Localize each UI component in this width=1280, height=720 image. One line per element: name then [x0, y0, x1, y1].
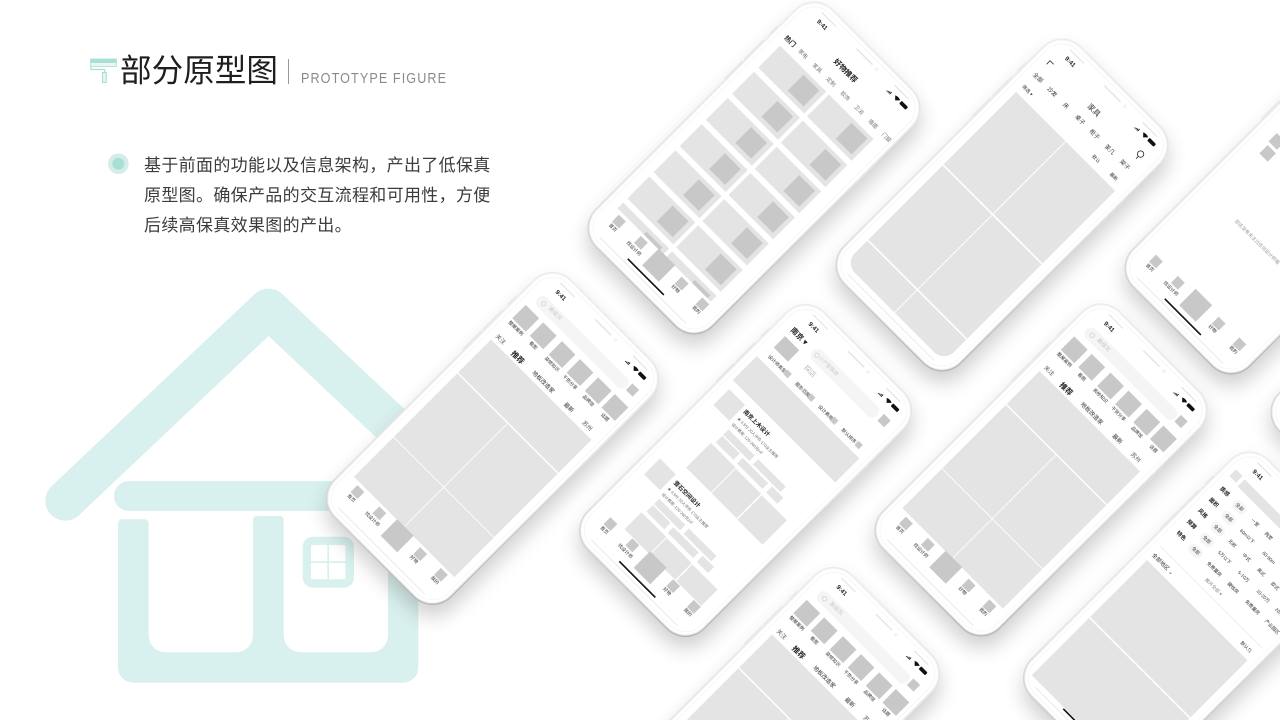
- category tabs: 全部: [1031, 71, 1045, 85]
- feed tabs: [774, 627, 876, 720]
- category icons: 装修知识: [824, 650, 842, 669]
- phone: furniture list: [818, 27, 1185, 394]
- heading: 家具: [1085, 101, 1103, 119]
- filter options: 风格: [1196, 507, 1210, 520]
- home bar: [619, 561, 656, 598]
- text block: description: [144, 156, 491, 235]
- sort row: 服务范围: [793, 380, 812, 399]
- sort row: 设计师类型: [766, 353, 788, 375]
- sort row: 默认排序: [840, 427, 858, 445]
- filter options: 一室: [1250, 517, 1261, 528]
- text block: description: 基于前面的功能以及信息架构，产出了低保真: [144, 156, 491, 175]
- icon: search: [1134, 150, 1145, 161]
- category icons: 整屋案例: [507, 319, 525, 338]
- status bar: 9:41: [807, 321, 821, 335]
- icon: bullet: [108, 153, 129, 174]
- tab bar: 找设计师: [625, 240, 643, 258]
- category tabs: 定制: [824, 75, 838, 89]
- phone: designers list: [561, 292, 929, 659]
- category tabs: [783, 33, 894, 145]
- search bar: 高级灰: [547, 305, 564, 322]
- category tabs: 家电: [796, 47, 810, 61]
- filter options: 北欧: [1226, 538, 1238, 549]
- tab bar: 找设计师: [363, 510, 382, 528]
- filter options: 展开全部 ▾: [1203, 576, 1224, 598]
- text block: description: 后续高保真效果图的产出。: [144, 216, 352, 235]
- tab bar: 好物: [1207, 323, 1219, 335]
- category icons: 看图: [527, 340, 539, 352]
- category icons: [788, 600, 909, 720]
- empty message: 您还没有关注过任何设计师哦: [1233, 218, 1280, 266]
- category icons: 话题: [599, 411, 611, 423]
- tab bar: 好物: [957, 585, 969, 597]
- filter row: 默认: [1090, 153, 1102, 165]
- feed tabs: 关注: [775, 627, 789, 641]
- tab bar: [344, 482, 450, 589]
- search bar: 高级灰: [828, 600, 845, 617]
- designer card 2: 壹石空间设计: [672, 479, 702, 509]
- status bar: 9:41: [835, 584, 849, 598]
- heading: 好物推荐: [832, 56, 860, 85]
- feed tabs: 关注: [1042, 364, 1056, 378]
- tab bar: 首页: [607, 222, 619, 234]
- phone: recommended goods: [570, 0, 937, 357]
- designer card 1: ★ 4.9分 20人评价 170业主推荐: [736, 415, 780, 459]
- image grid: [845, 92, 1115, 362]
- category tabs: 家具: [811, 61, 824, 75]
- category tabs: [1031, 71, 1132, 172]
- tab bar: 我的: [682, 606, 694, 618]
- channel label: 探店: [802, 363, 818, 379]
- designer card 1: 设计费用: 120-260元/㎡: [731, 421, 764, 455]
- city selector: 南京 ▾: [789, 325, 811, 348]
- filter options: 5-10万: [1236, 570, 1251, 584]
- image grid: [635, 635, 872, 720]
- tab bar: [587, 507, 709, 629]
- title: 部分原型图: [120, 52, 278, 88]
- subtitle: PROTOTYPE FIGURE: [301, 69, 446, 86]
- designer card 2: 设计费用: 120-260元/㎡: [661, 491, 695, 525]
- designer card 1: [668, 389, 824, 545]
- filter options: 预算: [1185, 518, 1199, 531]
- icon: house background: [65, 308, 425, 683]
- category tabs: 墙面: [866, 117, 880, 131]
- phone: home feed middle right: [857, 292, 1224, 659]
- designer card 1: 南京上木设计: [742, 408, 772, 438]
- filter options: 美式: [1255, 566, 1267, 578]
- category tabs: 桌子: [1073, 113, 1087, 127]
- filter options: 两室: [1263, 530, 1275, 541]
- tab bar: 找设计师: [616, 542, 635, 560]
- status bar: 9:41: [815, 18, 829, 32]
- area and sort: 默认⇅: [1239, 640, 1254, 655]
- designer card 2: [599, 458, 754, 614]
- tab bar: 首页: [1144, 262, 1156, 274]
- tab bar: 好物: [408, 554, 420, 565]
- feed tabs: 地板改造家: [1079, 400, 1105, 427]
- tab bar: 首页: [894, 524, 906, 536]
- image grid: [354, 340, 591, 577]
- status bar: [835, 584, 928, 677]
- status bar: [1102, 320, 1196, 414]
- search bar: [815, 589, 920, 694]
- feed tabs: [493, 332, 595, 434]
- home bar: [1063, 708, 1100, 720]
- filter options: 质感: [1218, 485, 1232, 498]
- tab bar: 首页: [346, 492, 357, 504]
- category icons: 装修知识: [543, 355, 561, 374]
- tab bar: 找设计师: [912, 542, 930, 560]
- filter options: 全部: [1190, 545, 1202, 557]
- image grid: [1032, 560, 1247, 720]
- category icons: [507, 305, 628, 427]
- filter options: 60-90m: [1261, 551, 1276, 565]
- placeholder squares: [1258, 133, 1280, 162]
- search bar: [534, 294, 639, 399]
- phone: home feed bottom: [589, 555, 957, 720]
- icon: back: [1047, 61, 1054, 68]
- divider: [288, 59, 289, 84]
- category icons: 品牌馆: [862, 688, 877, 703]
- tab bar: 首页: [599, 524, 610, 536]
- filter options: 中式: [1241, 552, 1252, 564]
- feed tabs: 最新: [1110, 432, 1124, 446]
- filter options: 硬核房: [1226, 580, 1241, 596]
- search bar: [1082, 325, 1188, 431]
- feed tabs: 推荐: [790, 643, 808, 661]
- product grid: [601, 46, 874, 318]
- filter options: 特色: [1175, 529, 1188, 543]
- placeholder image: [774, 336, 799, 362]
- category icons: 干货分享: [842, 668, 860, 687]
- feed tabs: [1041, 363, 1143, 465]
- category icons: [1055, 336, 1177, 458]
- category icons: 话题: [1148, 443, 1159, 455]
- status bar: 9:41: [554, 289, 568, 303]
- category icons: 话题: [880, 706, 892, 718]
- status bar: 9:41: [1102, 320, 1116, 334]
- category icons: 干货分享: [1109, 405, 1128, 423]
- tab bar: [596, 204, 718, 326]
- category tabs: 软饰: [838, 89, 852, 103]
- category tabs: 卫浴: [852, 103, 866, 117]
- home bar: [1164, 298, 1201, 335]
- feed tabs: 苏州: [1129, 450, 1143, 464]
- status bar: [807, 321, 900, 414]
- filter row: [1020, 83, 1120, 183]
- filter options: 60m以下: [1238, 528, 1256, 546]
- feed tabs: 最新: [562, 400, 576, 414]
- placeholder header: [1228, 469, 1280, 567]
- tab bar: 好物: [670, 283, 682, 295]
- feed tabs: 关注: [494, 332, 508, 346]
- feed tabs: 地板改造家: [530, 369, 557, 395]
- category icons: 整屋案例: [1055, 351, 1074, 369]
- status bar: 9:41: [1251, 468, 1265, 482]
- tab bar: 我的: [429, 574, 441, 586]
- category tabs: 柜子: [1088, 127, 1102, 141]
- category icons: 装修知识: [1091, 387, 1110, 405]
- sort row: [766, 353, 863, 450]
- category tabs: 架子: [1118, 158, 1131, 172]
- filter options: 免费量房: [1243, 598, 1262, 617]
- tab bar: 我的: [1228, 344, 1239, 356]
- category tabs: 床: [1061, 101, 1071, 111]
- filter options: 免费量房: [1205, 560, 1224, 579]
- filter options: 全部: [1212, 523, 1224, 535]
- category icons: 干货分享: [561, 373, 579, 392]
- phone: filter list: [1005, 440, 1280, 720]
- sort row: 设计费用: [816, 403, 835, 422]
- filter options: [1160, 483, 1280, 650]
- feed tabs: 苏州: [580, 419, 594, 433]
- area and sort: 全部地区 ⌄: [1150, 551, 1176, 577]
- filter options: 面积: [1207, 496, 1221, 509]
- filter row: 最新: [1108, 171, 1120, 183]
- image grid: [902, 371, 1140, 609]
- category tabs: 茶几: [1103, 143, 1117, 157]
- tab bar: 找设计师: [1162, 280, 1180, 298]
- status bar: [815, 18, 909, 112]
- tab bar: 我的: [691, 304, 702, 316]
- category icons: 整屋案例: [788, 614, 806, 633]
- banner: [733, 356, 859, 483]
- phone: partial at right edge: [1253, 174, 1280, 541]
- area and sort: [1150, 551, 1254, 655]
- feed tabs: 最新: [843, 695, 857, 709]
- feed tabs: 地板改造家: [811, 664, 838, 690]
- tab bar: 我的: [978, 606, 989, 618]
- filter options: 欧式: [1269, 580, 1280, 592]
- tab bar: [892, 514, 999, 620]
- category icons: 品牌馆: [581, 393, 596, 408]
- filter options: 全部: [1223, 512, 1235, 524]
- search bar: [808, 346, 891, 430]
- filter options: 全部: [1201, 534, 1213, 546]
- tab bar: [1142, 252, 1249, 358]
- category tabs: 门窗: [880, 131, 894, 144]
- filter options: 全部: [1234, 501, 1246, 513]
- filter options: 产业园区: [1263, 618, 1280, 636]
- category tabs: 沙发: [1045, 85, 1059, 99]
- filter options: 10-20万: [1255, 588, 1271, 605]
- filter row: 筛选 ▾: [1020, 83, 1035, 98]
- phone: home feed left: [308, 260, 676, 627]
- feed tabs: 推荐: [1058, 380, 1076, 398]
- search bar: 高级灰: [1095, 336, 1113, 354]
- tab bar: 好物: [661, 586, 673, 597]
- feed tabs: 推荐: [509, 348, 527, 366]
- filter options: 5万以下: [1216, 550, 1232, 566]
- phone: empty state: [1107, 30, 1280, 397]
- status bar: 9:41: [1063, 55, 1077, 69]
- status bar: [554, 289, 647, 382]
- category tabs: 热门: [783, 33, 798, 49]
- category icons: 品牌馆: [1129, 425, 1144, 440]
- text block: description: 原型图。确保产品的交互流程和可用性，方便: [144, 186, 491, 205]
- icon: paint roller: [90, 59, 116, 82]
- search bar: 小户型装修: [817, 355, 840, 378]
- category icons: 看图: [1076, 371, 1088, 383]
- home bar: [627, 258, 664, 295]
- status bar: [1063, 55, 1157, 149]
- category icons: 看图: [808, 635, 820, 647]
- designer card 2: ★ 4.9分 20人评价 170业主推荐: [666, 485, 710, 529]
